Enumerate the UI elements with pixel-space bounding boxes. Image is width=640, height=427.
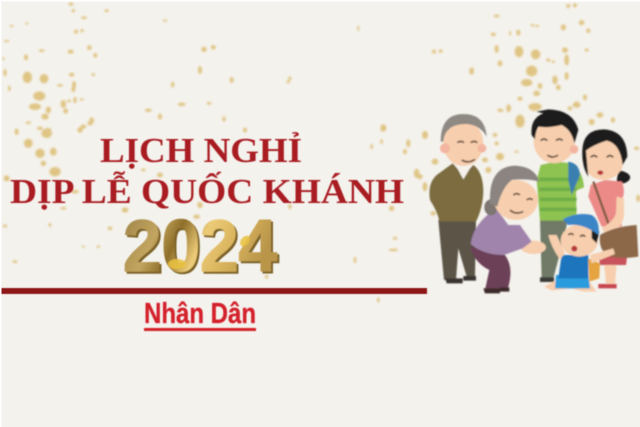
grandmother sweater — [471, 208, 532, 255]
title line 2: DỊP LỄ QUỐC KHÁNH — [10, 170, 404, 211]
mother legs — [604, 263, 617, 285]
father face — [541, 139, 563, 157]
mother hair — [582, 129, 627, 177]
grandfather hair — [441, 114, 487, 142]
child shorts — [555, 275, 590, 288]
grandfather ear right — [478, 144, 486, 153]
grandfather head — [443, 121, 483, 166]
child — [544, 214, 615, 292]
title — [10, 130, 404, 211]
grandmother hair — [490, 166, 539, 207]
mother bag — [600, 225, 638, 258]
mother — [582, 129, 638, 288]
year shadow: 2024 — [125, 208, 279, 289]
child mouth — [571, 246, 577, 252]
grandfather — [429, 114, 487, 283]
mother ponytail — [617, 170, 630, 183]
child head — [561, 225, 598, 257]
father trousers — [540, 218, 568, 278]
father hair — [531, 109, 578, 143]
child arm left — [548, 235, 565, 259]
grandmother head — [494, 180, 538, 220]
mother top — [588, 180, 624, 227]
label underline — [144, 328, 256, 331]
grandmother — [470, 166, 546, 293]
grandfather sweater — [429, 163, 483, 222]
left border highlight — [0, 0, 2, 427]
title line 1: LỊCH NGHỈ — [100, 130, 302, 170]
mother head — [583, 139, 624, 180]
year 2024 in gold — [123, 206, 279, 289]
grandmother shoes — [483, 287, 509, 293]
illustration: family — [429, 109, 638, 293]
grandmother trousers — [470, 247, 510, 290]
child face — [568, 234, 585, 237]
child hair — [592, 228, 599, 243]
father shirt — [537, 162, 584, 221]
grandmother bun — [484, 199, 498, 215]
year highlights — [168, 234, 252, 269]
grandfather trousers — [438, 220, 476, 280]
child shirt — [558, 255, 588, 278]
grandmother hand — [521, 241, 546, 254]
mother mouth — [597, 170, 603, 175]
father ear — [570, 145, 578, 154]
mother shoes — [598, 284, 617, 288]
father — [531, 109, 584, 282]
grandmother face — [510, 194, 533, 213]
grandfather ears — [440, 143, 450, 153]
grandfather shoes — [445, 276, 476, 283]
child arm right — [590, 248, 615, 263]
source label: Nhân Dân — [144, 298, 256, 331]
father backpack straps — [537, 162, 580, 195]
grandfather collar — [455, 164, 472, 179]
grandfather face — [457, 141, 477, 162]
child backpack — [588, 258, 600, 282]
confetti: gold flecks — [2, 2, 640, 302]
mother face — [591, 156, 613, 157]
mother skirt — [598, 255, 627, 265]
label text: Nhân Dân — [144, 298, 256, 330]
bag strap — [593, 182, 608, 223]
child hat — [563, 214, 599, 235]
child legs — [544, 280, 597, 292]
divider rule — [0, 288, 427, 294]
father shirt stripes — [539, 179, 580, 209]
year face: 2024 — [123, 206, 277, 287]
mother arm — [602, 197, 624, 235]
top border highlight — [0, 0, 640, 2]
father head — [534, 120, 575, 163]
father shoe — [540, 277, 554, 282]
